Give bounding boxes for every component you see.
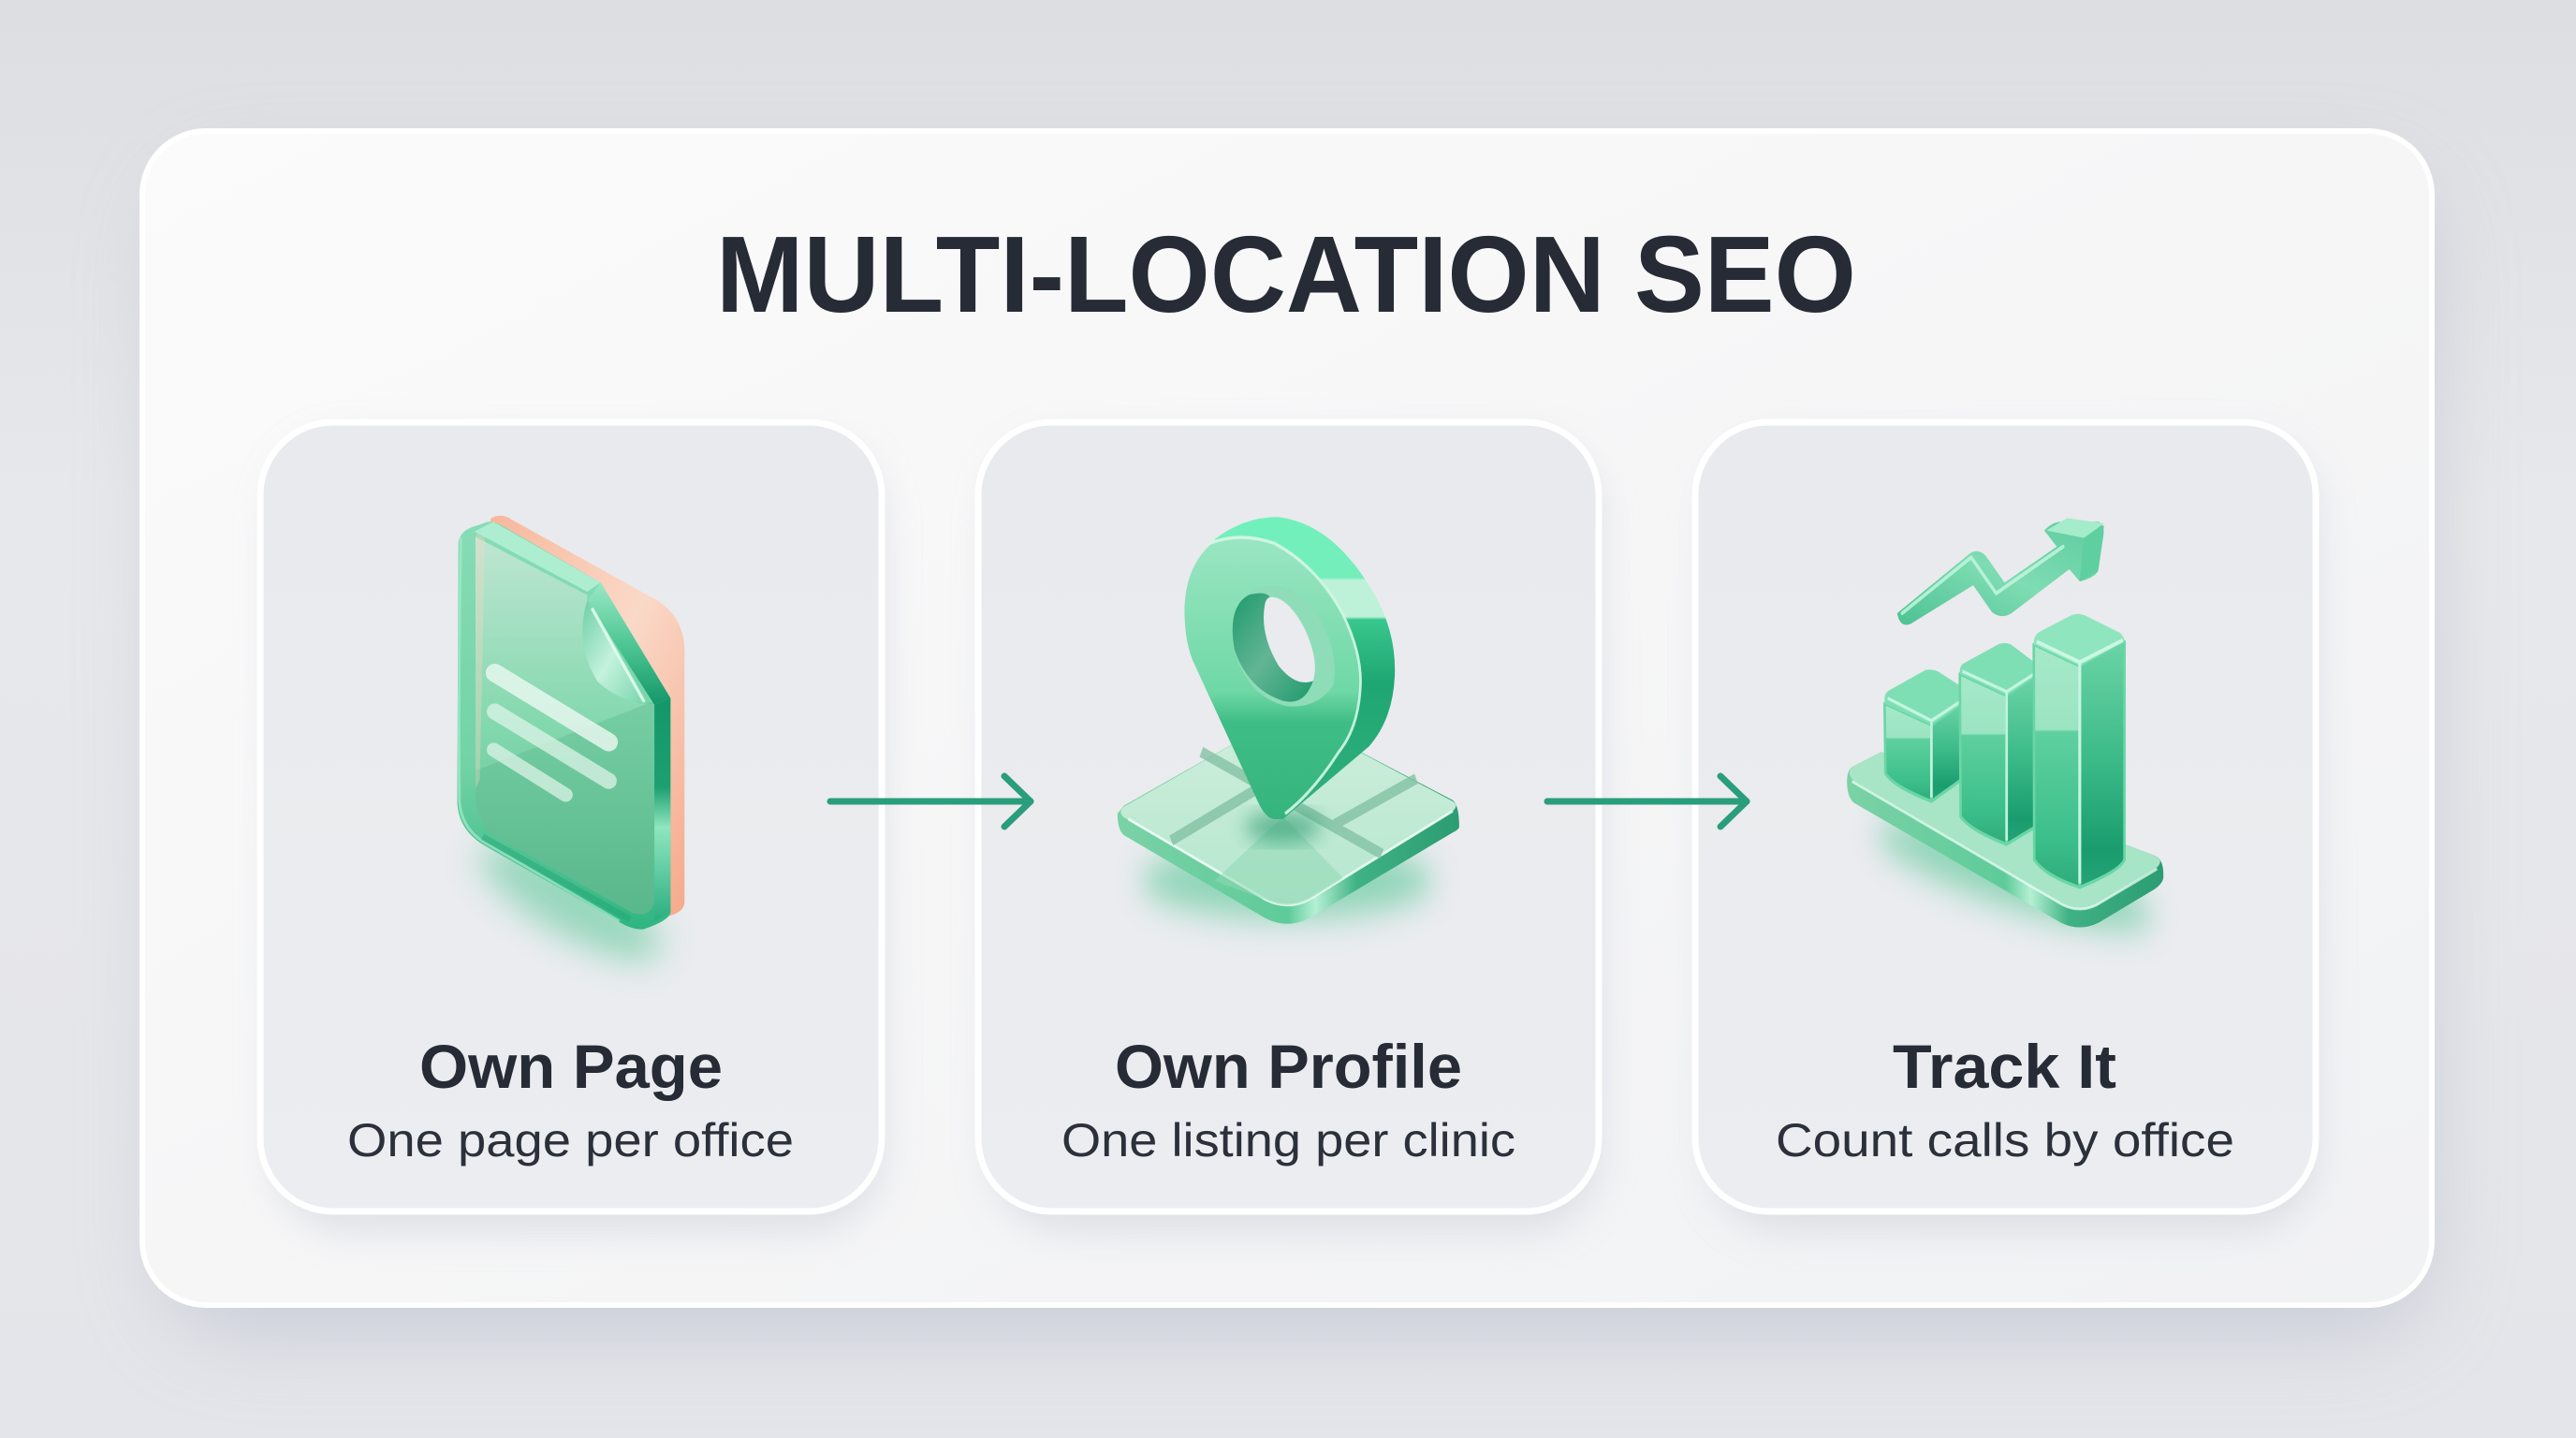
main panel bbox=[142, 131, 2432, 1305]
pin face bbox=[1184, 536, 1361, 819]
pin body side bbox=[1214, 517, 1395, 819]
heading: own profile: Own Profile bbox=[1115, 1032, 1462, 1101]
icon: map pin bbox=[1118, 517, 1459, 924]
chart base plate bbox=[1847, 752, 2163, 928]
icon: document bbox=[457, 516, 684, 981]
text: count calls by office: Count calls by office bbox=[1776, 1114, 2234, 1167]
panel: own profile bbox=[978, 422, 1600, 1231]
icon: bar chart with trend arrow bbox=[1847, 518, 2163, 951]
pin hole bbox=[1233, 585, 1335, 707]
map plate bbox=[1118, 715, 1459, 924]
heading: own page: Own Page bbox=[419, 1032, 723, 1101]
panel shadow bbox=[164, 173, 2429, 1334]
text: one listing per clinic: One listing per clinic bbox=[1061, 1114, 1515, 1167]
bar small bbox=[1884, 669, 1963, 801]
bar medium bbox=[1960, 643, 2035, 844]
arrow: profile to tracking bbox=[1547, 776, 1747, 827]
document lines bbox=[493, 673, 608, 795]
bar tall bbox=[2034, 614, 2125, 888]
title: MULTI-LOCATION SEO bbox=[716, 213, 1856, 335]
panel: own page bbox=[260, 422, 882, 1231]
trend arrow bbox=[1897, 518, 2104, 625]
arrow: page to profile bbox=[830, 776, 1031, 827]
heading: track it: Track It bbox=[1893, 1032, 2116, 1101]
text: one page per office: One page per office bbox=[347, 1114, 794, 1167]
panel: track it bbox=[1695, 422, 2317, 1231]
